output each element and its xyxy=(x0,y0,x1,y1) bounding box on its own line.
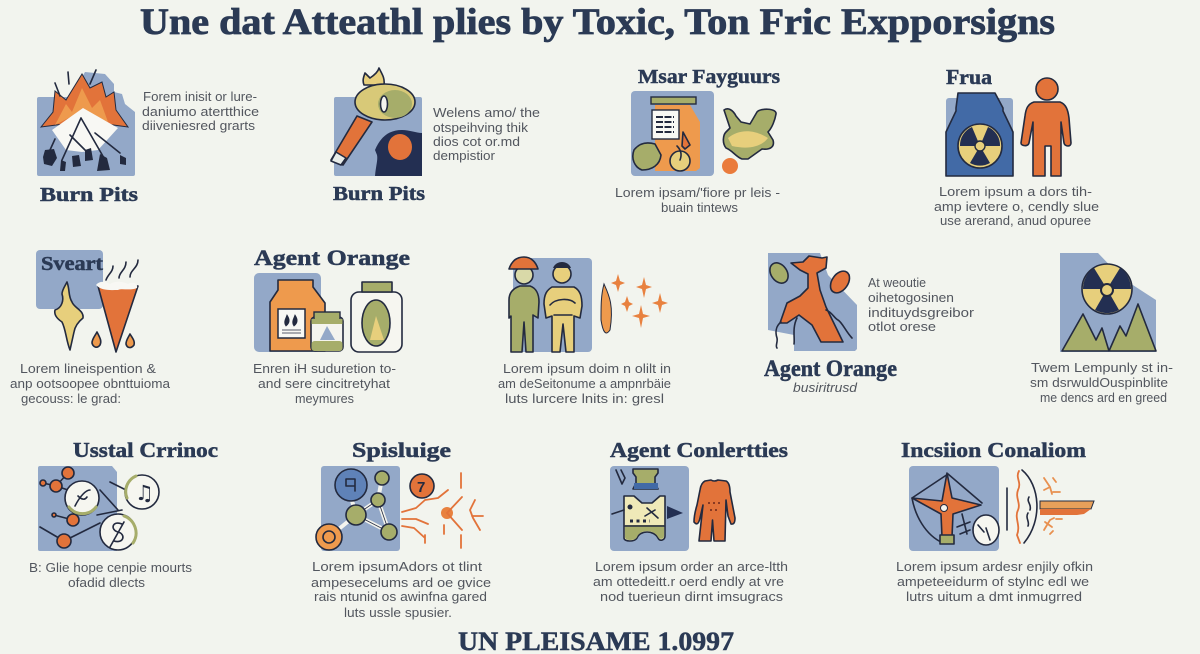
panel: burn pits 1 xyxy=(37,70,259,206)
text: description xyxy=(433,106,540,163)
panel: sveart xyxy=(10,250,170,406)
icon: orange figure xyxy=(766,253,857,351)
text: description xyxy=(934,185,1099,228)
text: description: otspeihving thik xyxy=(433,121,529,135)
panel: msar fayguurs xyxy=(615,66,780,215)
text: description: Lorem ipsum doim n olilt in xyxy=(503,362,671,376)
text: description: daniumo atertthice xyxy=(142,105,259,119)
icon: container with food xyxy=(631,91,714,176)
icon: molecule xyxy=(316,466,400,551)
panel: burn pits 2 xyxy=(331,68,540,205)
text: description: diiveniesred grarts xyxy=(142,119,255,133)
text: description: Lorem ipsam/'fiore pr leis - xyxy=(615,186,780,200)
heading: Agent Orange xyxy=(764,356,897,381)
heading: Usstal Crrinoc xyxy=(73,438,218,462)
panel: agent conlertties xyxy=(593,438,788,604)
text: description: anp ootsoopee obnttuioma xyxy=(10,377,170,391)
icon: radioactive barrel xyxy=(946,93,1013,176)
icon: sparks xyxy=(601,274,668,333)
text: description: ofadid dlects xyxy=(68,576,145,590)
icon: nerve burst xyxy=(402,473,483,548)
text: description: Lorem ipsum ardesr enjily ofkin xyxy=(896,560,1093,574)
text: description xyxy=(142,90,259,133)
icon: person xyxy=(1021,78,1071,176)
title: Une dat Atteathl plies by Toxic, Ton Fric Expporsigns xyxy=(140,2,1055,43)
text: description: use arerand, anud opuree xyxy=(940,214,1091,228)
heading: Burn Pits xyxy=(40,184,138,206)
icon: two workers xyxy=(509,257,592,352)
text: description: meymures xyxy=(295,392,354,406)
text: description: ampesecelums ard oe gvice xyxy=(311,576,491,590)
text: description: ampeteeidurm of stylnc edl we xyxy=(897,575,1089,589)
text: description: gecouss: le grad: xyxy=(21,392,121,406)
panel: spisluige xyxy=(311,438,491,620)
icon: green organ xyxy=(722,109,776,174)
panel: workers xyxy=(498,257,671,406)
text: description: lutrs uitum a dmt inmugrred xyxy=(906,590,1082,604)
icon: torch and head xyxy=(331,68,422,176)
text: description: dempistior xyxy=(433,149,495,163)
icon: device xyxy=(610,466,689,551)
icon: cross-shaped implant xyxy=(909,466,999,551)
text: description: At weoutie xyxy=(868,276,926,290)
text: description: luts ussle spusier. xyxy=(344,606,452,620)
heading: Agent Orange xyxy=(254,245,410,270)
text: description: nod tuerieun dirnt imsugracs xyxy=(600,590,783,604)
text: description xyxy=(311,560,491,620)
text: description: Enren iH suduretion to- xyxy=(253,362,396,376)
panel: agent orange 2 xyxy=(764,253,974,395)
text: description: indituydsgreibor xyxy=(868,306,974,320)
panel: agent orange 1 xyxy=(253,245,410,406)
text: subtitle: busiritrusd xyxy=(793,381,858,395)
text: description xyxy=(29,561,192,590)
heading: Agent Conlertties xyxy=(610,438,788,462)
text: description: Lorem lineispention & xyxy=(20,362,157,376)
icon: nerve burst: 7 xyxy=(417,479,425,496)
text: description xyxy=(1030,361,1173,405)
text: description: am deSeitonume a ampnrbäie xyxy=(498,377,671,391)
heading: Frua xyxy=(946,65,993,89)
icon: radiation over mountains xyxy=(1060,253,1156,352)
text: description: B: Glie hope cenpie mourts xyxy=(29,561,192,575)
text: description: and sere cincitretyhat xyxy=(258,377,391,391)
text: description: oihetogosinen xyxy=(868,291,954,305)
text: description: dios cot or.md xyxy=(433,135,520,149)
text: description xyxy=(10,362,170,406)
text: description xyxy=(253,362,396,406)
text: description: otlot orese xyxy=(868,320,936,334)
icon: connected nodes xyxy=(38,466,159,551)
text: description: amp ievtere o, cendly slue xyxy=(934,200,1099,214)
panel: incsiion conaliom xyxy=(896,438,1094,604)
panel: frua xyxy=(934,65,1099,228)
heading: Burn Pits xyxy=(333,183,425,205)
text: description: luts lurcere lnits in: gresl xyxy=(505,392,664,406)
icon: smoke and cone xyxy=(36,250,138,352)
text: description: rais ntunid os awinfna gared xyxy=(314,590,487,604)
text: description xyxy=(896,560,1093,604)
text: description: me dencs ard en greed xyxy=(1040,391,1167,405)
text: description xyxy=(498,362,671,406)
text: description: Lorem ipsum order an arce-ltth xyxy=(595,560,788,574)
text: description: sm dsrwuldOuspinblite xyxy=(1030,376,1168,390)
text: description: Twem Lempunly st in- xyxy=(1031,361,1173,375)
text: description xyxy=(593,560,788,604)
icon: orange suit xyxy=(694,480,735,541)
icon: carton and jars xyxy=(254,273,402,352)
icon: cross-section with beam xyxy=(1007,470,1094,543)
text: description: Welens amo/ the xyxy=(433,106,540,120)
heading: Spisluige xyxy=(352,438,451,462)
text: description xyxy=(615,186,780,215)
panel: usstal crrinoc xyxy=(29,438,218,590)
text: description: buain tintews xyxy=(661,201,738,215)
text: description: Lorem ipsumAdors ot tlint xyxy=(312,560,483,574)
heading: Incsiion Conaliom xyxy=(901,438,1087,462)
icon: burning pit xyxy=(37,70,135,176)
panel: radiation xyxy=(1030,253,1173,405)
heading: Msar Fayguurs xyxy=(638,66,780,88)
text: description: am ottedeitt.r oerd endly at vre xyxy=(593,575,784,589)
text: description: Forem inisit or lure- xyxy=(143,90,257,104)
text: description xyxy=(868,276,974,334)
icon: connected nodes: ♫ xyxy=(135,481,154,505)
heading: Sveart xyxy=(41,253,103,275)
text: description: Lorem ipsum a dors tih- xyxy=(939,185,1092,199)
